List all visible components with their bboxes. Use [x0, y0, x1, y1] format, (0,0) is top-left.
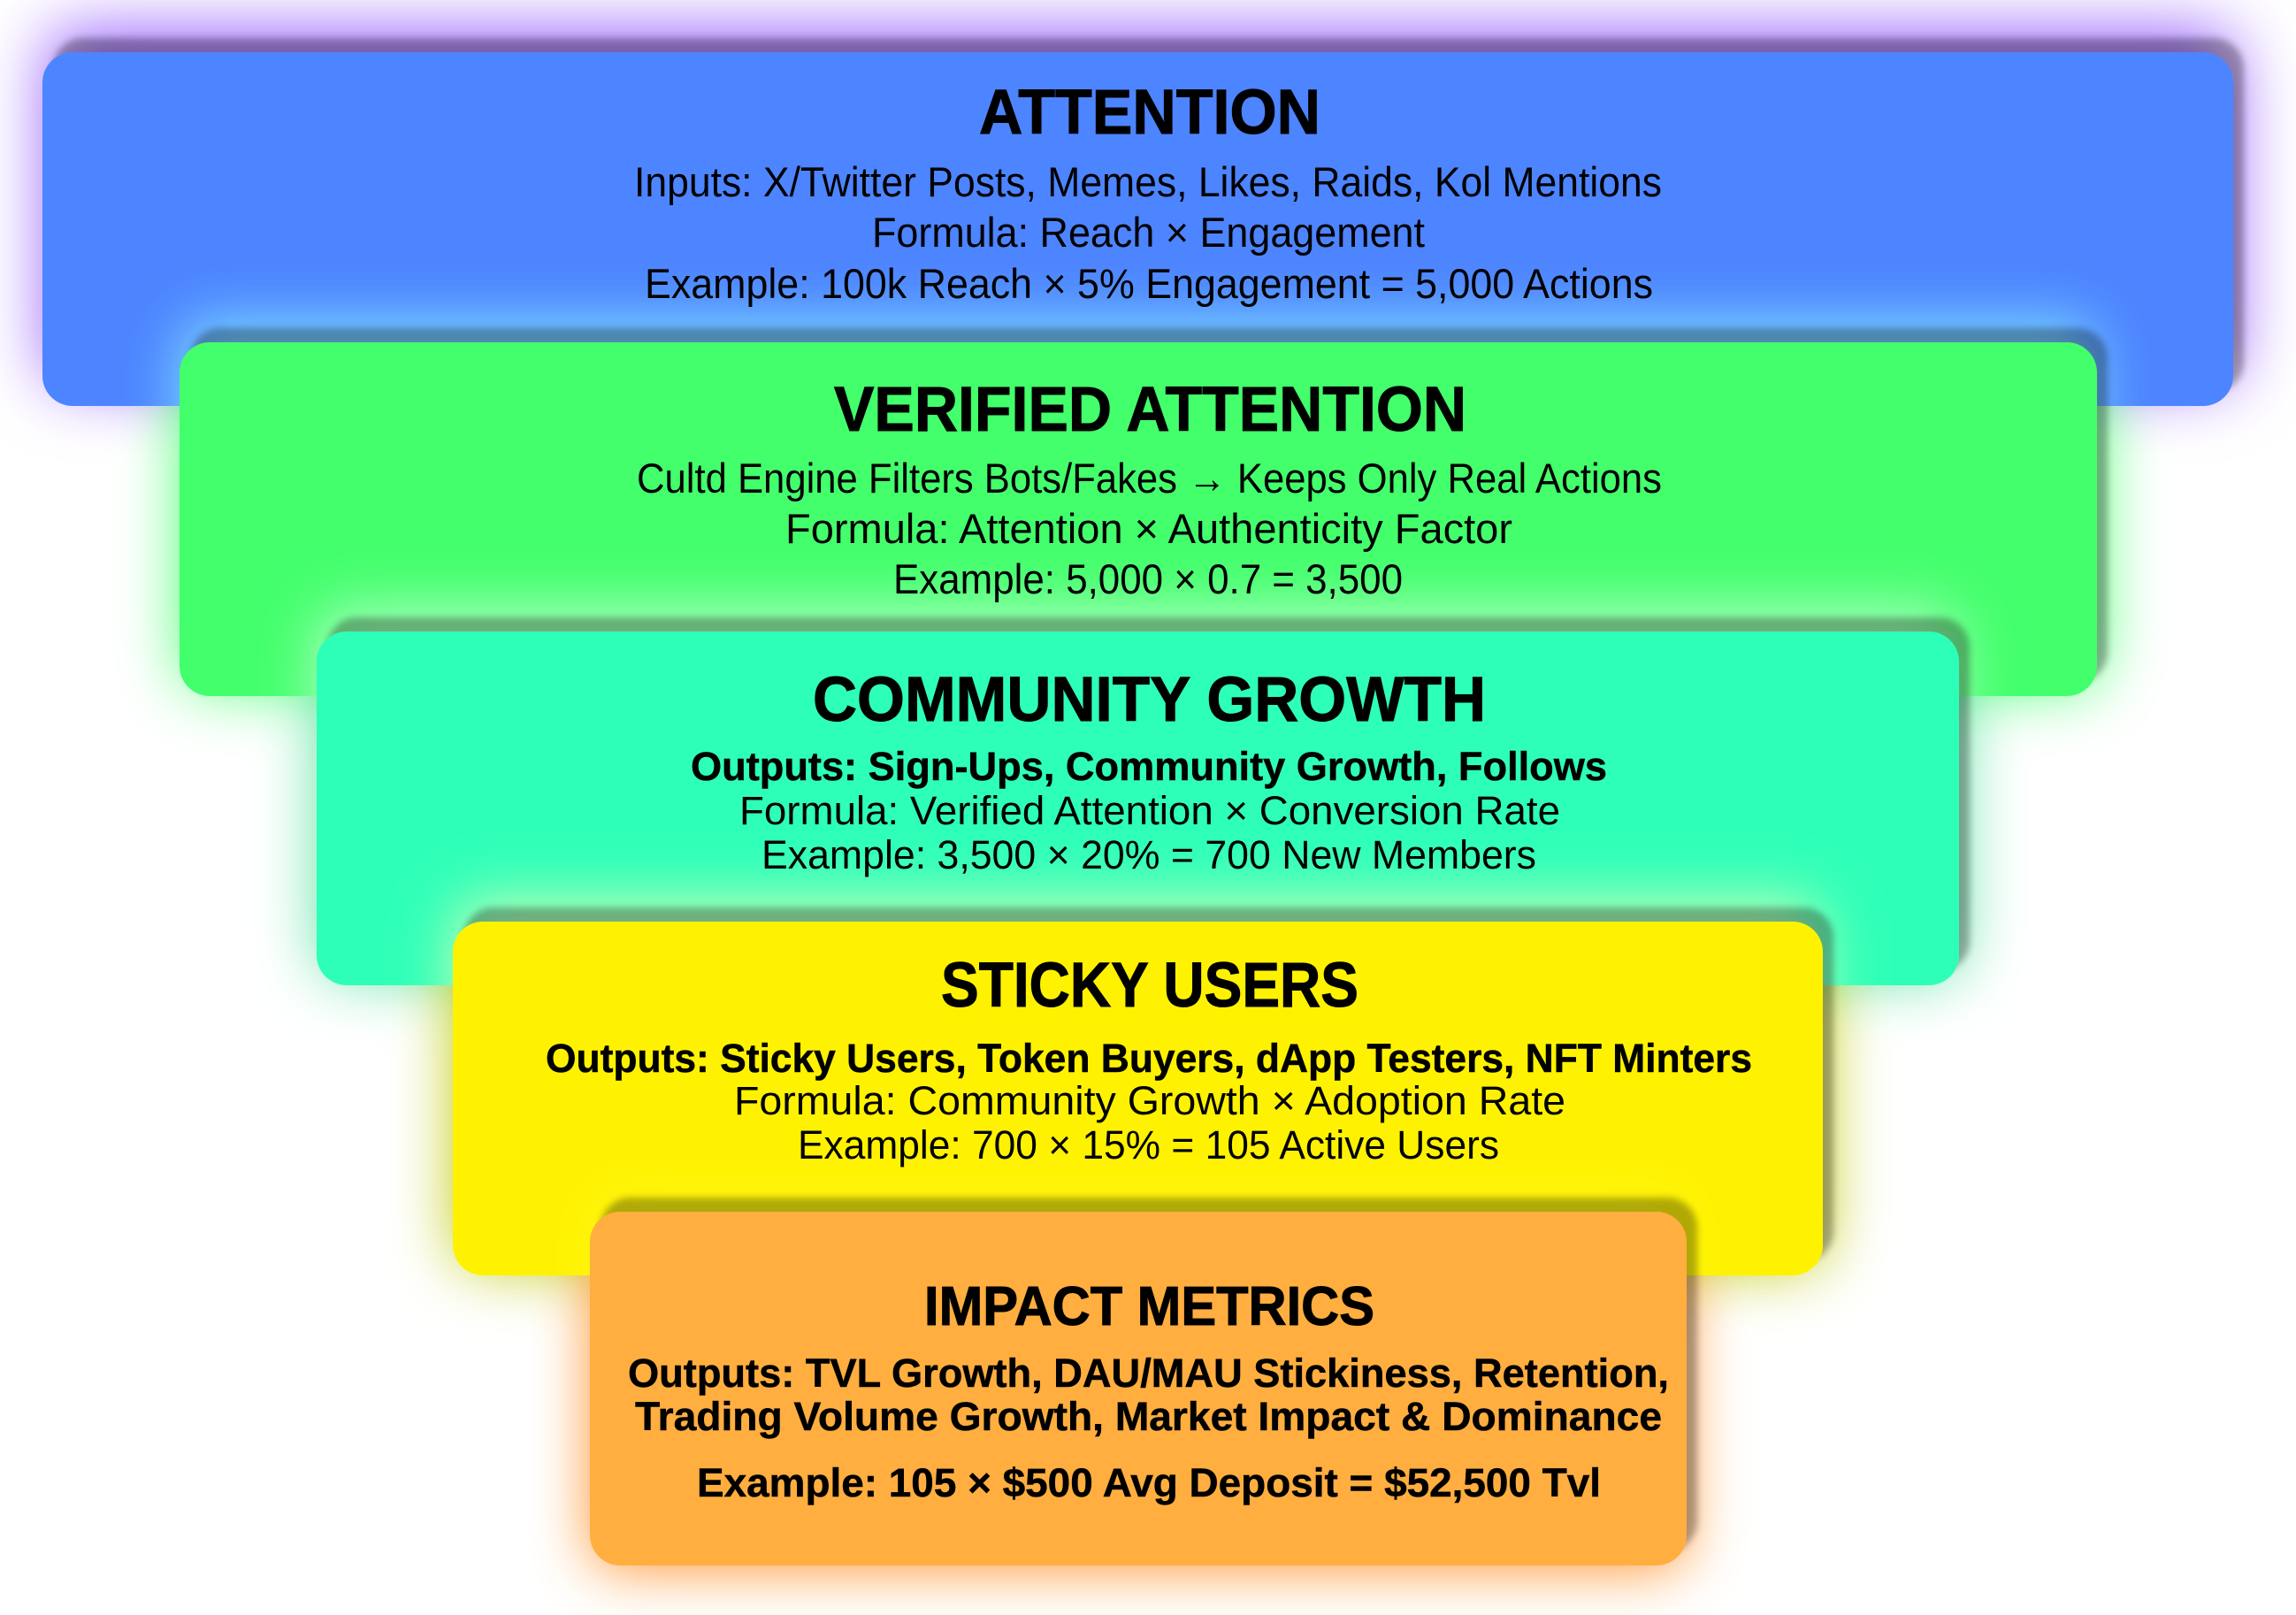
verified attention box: [180, 342, 2097, 696]
impact metrics box: [590, 1212, 1687, 1565]
panel: attention: [0, 0, 2287, 435]
formula line: Formula: Reach × Engagement: [872, 209, 1425, 256]
panel: sticky users: [401, 904, 1880, 1321]
attention box: [42, 52, 2233, 406]
sticky users box: [453, 922, 1823, 1275]
impact metrics text: [628, 1276, 1669, 1505]
orange outer glow: [590, 1212, 1687, 1565]
formula line: Formula: Community Growth × Adoption Rate: [734, 1078, 1565, 1123]
orange glow cast on yellow: [590, 1212, 1687, 1565]
panel: verified attention: [131, 324, 2151, 738]
outputs line: Outputs: Sign-Ups, Community Growth, Follows: [691, 744, 1607, 789]
panel: impact metrics: [543, 1194, 1733, 1615]
engine line: Cultd Engine Filters Bots/Fakes → Keeps Only Real Actions: [637, 455, 1662, 501]
yellow glow cast on teal: [453, 922, 1823, 1275]
outputs line: Outputs: Sticky Users, Token Buyers, dApp Testers, NFT Minters: [546, 1036, 1752, 1081]
inputs line: Inputs: X/Twitter Posts, Memes, Likes, Raids, Kol Mentions: [634, 158, 1662, 205]
example line: Example: 3,500 × 20% = 700 New Members: [762, 832, 1536, 877]
teal outer glow: [317, 631, 1959, 985]
example line: Example: 5,000 × 0.7 = 3,500: [893, 555, 1403, 602]
yellow outer glow: [453, 922, 1823, 1275]
community growth box: [317, 631, 1959, 985]
verified attention text: [637, 375, 1662, 602]
attention text: [634, 78, 1662, 307]
community growth text: [691, 665, 1607, 877]
example line: Example: 105 × $500 Avg Deposit = $52,500 Tvl: [697, 1460, 1601, 1505]
green outer glow: [180, 342, 2097, 696]
outputs line two: Trading Volume Growth, Market Impact & Dominance: [635, 1394, 1662, 1439]
formula line: Formula: Verified Attention × Conversion Rate: [739, 788, 1560, 833]
outputs line one: Outputs: TVL Growth, DAU/MAU Stickiness, Retention,: [628, 1351, 1669, 1396]
teal glow cast on green: [317, 631, 1959, 985]
purple outer glow: [42, 52, 2233, 406]
example line: Example: 100k Reach × 5% Engagement = 5,000 Actions: [645, 260, 1653, 307]
heading: verified attention: VERIFIED ATTENTION: [834, 375, 1466, 445]
green glow cast on blue: [180, 342, 2097, 696]
heading: sticky users: STICKY USERS: [941, 951, 1358, 1021]
panel: community growth: [269, 614, 2011, 1026]
example line: Example: 700 × 15% = 105 Active Users: [798, 1122, 1499, 1167]
sticky users text: [546, 951, 1752, 1167]
heading: community growth: COMMUNITY GROWTH: [813, 665, 1486, 735]
formula line: Formula: Attention × Authenticity Factor: [785, 505, 1512, 552]
heading: impact metrics: IMPACT METRICS: [924, 1276, 1374, 1337]
heading: attention: ATTENTION: [979, 78, 1320, 148]
